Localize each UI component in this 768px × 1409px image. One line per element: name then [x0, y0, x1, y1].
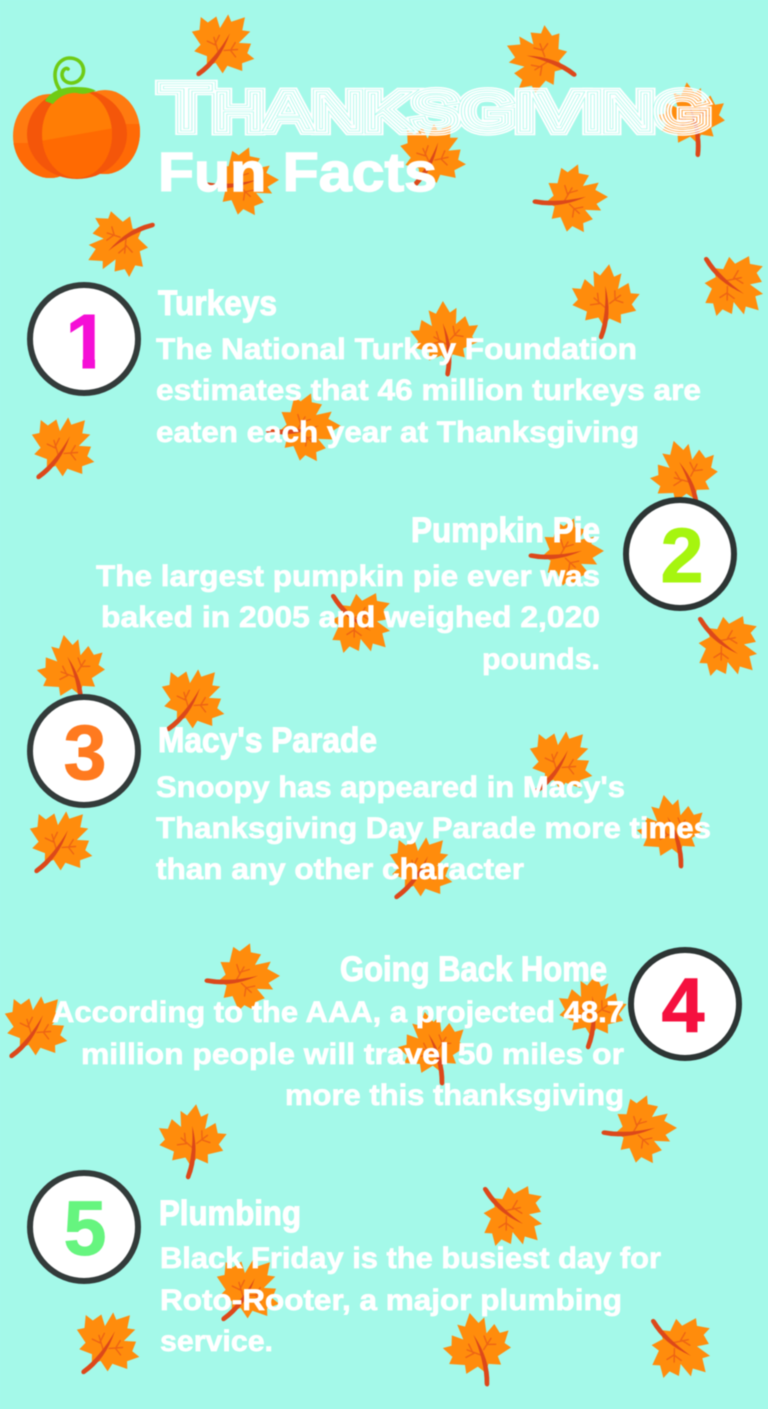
leaf: [641, 430, 730, 524]
body text: Black Friday is the busiest day for: [160, 1242, 661, 1275]
body text: million people will travel 50 miles or: [81, 1038, 624, 1071]
body text: baked in 2005 and weighed 2,020: [101, 601, 600, 634]
leaf: [0, 978, 84, 1079]
leaf: [568, 261, 642, 342]
icon: pumpkin: [10, 58, 145, 185]
leaf: [628, 1295, 730, 1396]
body text: than any other character: [156, 853, 524, 886]
leaf: [681, 233, 768, 334]
leaf: [201, 145, 282, 219]
leaf: [30, 626, 115, 717]
heading: Plumbing: Plumbing: [159, 1194, 301, 1233]
leaf: [391, 1003, 476, 1094]
heading: Pumpkin Pie: Pumpkin Pie: [411, 511, 600, 550]
body text: The largest pumpkin pie ever was: [96, 560, 600, 593]
number badge 4: 4: [662, 963, 705, 1049]
body text: eaten each year at Thanksgiving: [156, 416, 639, 449]
title line: Thanksgiving: [154, 79, 714, 137]
number badge 1: [30, 285, 138, 393]
fact 3: Macy's Parade: [30, 697, 711, 886]
leaf: [9, 793, 109, 894]
body text: Thanksgiving Day Parade more times: [156, 812, 711, 845]
body text: estimates that 46 million turkeys are: [156, 374, 701, 407]
leaf: [494, 15, 589, 106]
number badge 5: 5: [64, 1186, 106, 1272]
leaf: [383, 107, 479, 206]
number badge 2: 2: [661, 513, 703, 599]
number badge 1: 1: [66, 299, 108, 385]
fact 5: Plumbing: [30, 1173, 661, 1358]
number badge 3: [30, 697, 138, 805]
leaf: [599, 1093, 680, 1167]
leaf: [555, 971, 629, 1052]
leaf: [526, 516, 607, 590]
body text: service.: [160, 1325, 273, 1358]
leaf: [263, 391, 344, 465]
body text: [156, 771, 711, 886]
number badge 4: [631, 950, 739, 1058]
body text: The National Turkey Foundation: [156, 333, 637, 366]
body text: Snoopy has appeared in Macy's: [156, 771, 625, 804]
leaf: [436, 1304, 521, 1395]
leaf: [652, 77, 732, 163]
leaf: [460, 1163, 562, 1264]
leaf: [196, 1241, 296, 1342]
body text: Roto-Rooter, a major plumbing: [160, 1284, 622, 1317]
leaf: [11, 399, 111, 500]
heading: Going Back Home: Going Back Home: [340, 950, 607, 989]
body text: pounds.: [482, 643, 600, 676]
leaf: [675, 593, 768, 694]
body text: more this thanksgiving: [285, 1079, 624, 1112]
title: [154, 79, 714, 193]
leaf: [308, 570, 410, 671]
number badge 2: [626, 500, 734, 608]
leaf: [72, 194, 171, 290]
leaf: [509, 713, 609, 814]
body text: [52, 996, 624, 1112]
body text: [160, 1242, 661, 1358]
heading: Turkeys: Turkeys: [158, 284, 277, 323]
body text: [156, 333, 701, 449]
title line: Fun Facts: Fun Facts: [158, 141, 437, 203]
fact 2: Pumpkin Pie: [96, 500, 734, 676]
body text: [96, 560, 600, 676]
number badge 3: 3: [64, 710, 106, 796]
leaf: [56, 1294, 156, 1395]
leaf: [171, 0, 271, 97]
leaf: [408, 298, 482, 379]
leaf: [630, 786, 715, 877]
leaf: [141, 651, 241, 752]
leaf: [155, 1101, 229, 1182]
heading: Macy's Parade: Macy's Parade: [158, 721, 377, 760]
fact 1: Turkeys: [30, 284, 701, 449]
leaf: [530, 162, 611, 236]
leaf: [369, 819, 469, 920]
fact 4: Going Back Home: [52, 950, 739, 1112]
body text: According to the AAA, a projected 48.7: [52, 996, 624, 1029]
leaf: [202, 941, 283, 1015]
number badge 5: [30, 1173, 138, 1281]
